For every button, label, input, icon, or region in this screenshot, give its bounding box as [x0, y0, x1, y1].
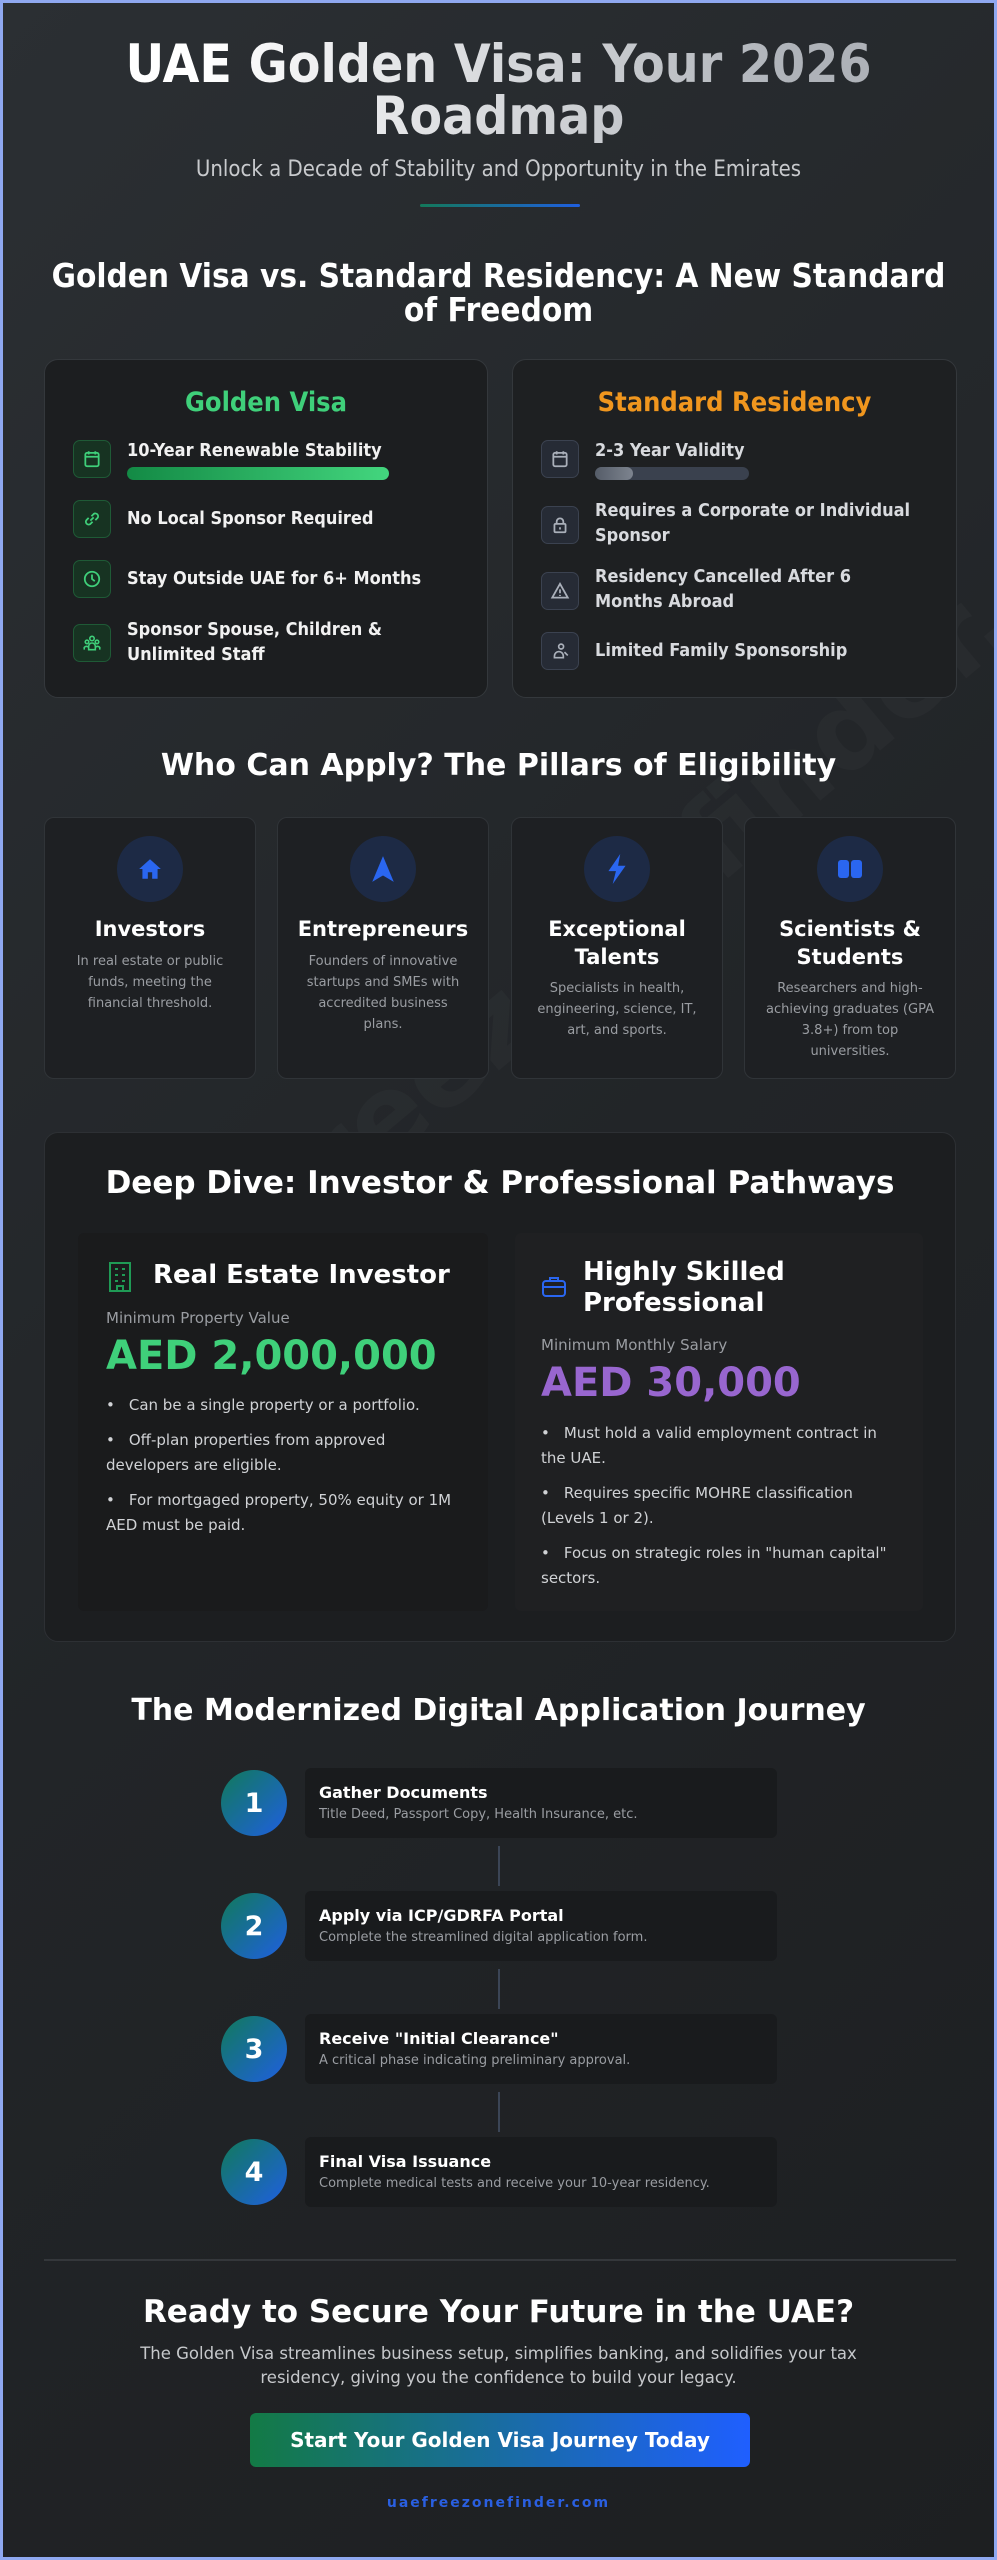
card: real estate investor: Real Estate Investor [153, 1260, 450, 1290]
card: highly skilled professional [515, 1233, 923, 1611]
step 1 [221, 1768, 776, 1838]
card: scientists [744, 817, 956, 1079]
item: stay outside: Stay Outside UAE for 6+ Months [127, 568, 421, 589]
heading: eligibility: Who Can Apply? The Pillars of Eligibility [161, 748, 836, 783]
card: entrepreneurs [277, 817, 489, 1079]
card: highly skilled professional: Requires specific MOHRE classification (Levels 1 or 2). [541, 1484, 853, 1527]
item: limited family: Limited Family Sponsorship [595, 640, 847, 661]
item: 2-3 year: 2-3 Year Validity [595, 440, 745, 461]
text: Gather Documents [319, 1783, 488, 1802]
card: highly skilled professional: Must hold a valid employment contract in the UAE. [541, 1424, 877, 1467]
item: cancelled [541, 566, 851, 612]
icon: bolt [584, 836, 650, 902]
text: Complete the streamlined digital application form. [319, 1930, 647, 1945]
card: real estate investor: Minimum Property Value [106, 1309, 290, 1327]
text: A critical phase indicating preliminary approval. [319, 2053, 630, 2068]
subtitle: Unlock a Decade of Stability and Opportunity in the Emirates [196, 157, 801, 182]
icon: briefcase [542, 1277, 566, 1297]
step 2 [221, 1891, 776, 1961]
item: 2-3 year [541, 440, 749, 480]
card: investors: In real estate or public funds, meeting the financial threshold. [77, 954, 223, 1011]
card: highly skilled professional: Minimum Monthly Salary [541, 1336, 727, 1354]
deep dive heading: Deep Dive: Investor & Professional Pathways [106, 1165, 894, 1201]
text: Title Deed, Passport Copy, Health Insurance, etc. [319, 1807, 638, 1822]
item: requires sponsor [541, 500, 910, 546]
card: talents: Exceptional [548, 917, 686, 941]
panel: golden visa [44, 359, 488, 698]
card: real estate investor: Off-plan properties from approved developers are eligible. [106, 1431, 385, 1474]
item: 10-year [73, 440, 389, 480]
title [3, 39, 994, 143]
CTA text: The Golden Visa streamlines business setup, simplifies banking, and solidifies your tax residency, giving you the confidence to build your legacy. [140, 2344, 857, 2387]
card: investors: Investors [95, 917, 205, 941]
card: real estate investor: For mortgaged property, 50% equity or 1M AED must be paid. [106, 1491, 451, 1534]
step 3 [221, 2014, 630, 2084]
golden visa title: Golden Visa [185, 387, 347, 418]
card: real estate investor: Can be a single property or a portfolio. [129, 1396, 420, 1414]
card: highly skilled professional: Focus on strategic roles in "human capital" sectors. [541, 1544, 886, 1587]
heading: comparison [52, 256, 945, 329]
CTA button [250, 2413, 750, 2467]
CTA heading: Ready to Secure Your Future in the UAE? [143, 2294, 854, 2330]
text: 4 [245, 2156, 263, 2188]
item: requires sponsor: Sponsor [595, 525, 670, 546]
item: cancelled: Residency Cancelled After 6 [595, 566, 851, 587]
step 4 [221, 2137, 710, 2207]
item: sponsor family: Sponsor Spouse, Children & [127, 619, 382, 640]
item: stay outside [73, 560, 421, 598]
card: talents [511, 817, 723, 1079]
icon: rocket [350, 836, 416, 902]
footer url: uaefreezonefinder.com [387, 2495, 610, 2511]
card: entrepreneurs: Entrepreneurs [298, 917, 468, 941]
item: sponsor family [73, 619, 382, 665]
title: Roadmap [373, 86, 624, 147]
card: real estate investor: AED 2,000,000 [106, 1333, 437, 1379]
item: cancelled: Months Abroad [595, 591, 734, 612]
card: highly skilled professional: AED 30,000 [541, 1360, 801, 1406]
item: no sponsor [73, 500, 373, 538]
card: investors [44, 817, 256, 1079]
text: 2 [245, 1910, 263, 1942]
icon: book [817, 836, 883, 902]
item: requires sponsor: Requires a Corporate or Individual [595, 500, 910, 521]
heading: journey: The Modernized Digital Application Journey [131, 1693, 866, 1728]
standard residency title: Standard Residency [598, 387, 871, 418]
icon: house [117, 836, 183, 902]
text: Apply via ICP/GDRFA Portal [319, 1906, 564, 1925]
heading: comparison: Golden Visa vs. Standard Residency: A New Standard [52, 256, 945, 295]
icon: building [109, 1262, 131, 1292]
panel: deep dive [44, 1132, 956, 1642]
text: 1 [245, 1788, 263, 1818]
item: sponsor family: Unlimited Staff [127, 644, 265, 665]
text: Complete medical tests and receive your 10-year residency. [319, 2176, 710, 2191]
card: talents: Talents [575, 945, 659, 969]
accent line [420, 204, 580, 207]
title: UAE Golden Visa: Your 2026 [125, 34, 872, 95]
card: scientists: Students [797, 945, 903, 969]
CTA button: Start Your Golden Visa Journey Today [290, 2428, 710, 2452]
heading: comparison: of Freedom [404, 290, 593, 329]
item: 10-year: 10-Year Renewable Stability [127, 440, 382, 461]
text: Final Visa Issuance [319, 2152, 491, 2171]
card: scientists: Scientists & [779, 917, 921, 941]
card: talents: Specialists in health, engineering, science, IT, art, and sports. [537, 981, 697, 1038]
card: highly skilled professional: Highly Skilled [583, 1257, 785, 1287]
card: real estate investor [78, 1233, 488, 1611]
card: entrepreneurs: Founders of innovative startups and SMEs with accredited business plans. [307, 954, 459, 1032]
item: no sponsor: No Local Sponsor Required [127, 508, 373, 529]
card: scientists: Researchers and high-achieving graduates (GPA 3.8+) from top universities. [766, 981, 934, 1059]
card: highly skilled professional: Professional [583, 1288, 764, 1318]
text: 3 [245, 2034, 263, 2064]
panel: standard residency [512, 359, 957, 698]
text: Receive "Initial Clearance" [319, 2029, 559, 2048]
item: limited family [541, 632, 847, 670]
